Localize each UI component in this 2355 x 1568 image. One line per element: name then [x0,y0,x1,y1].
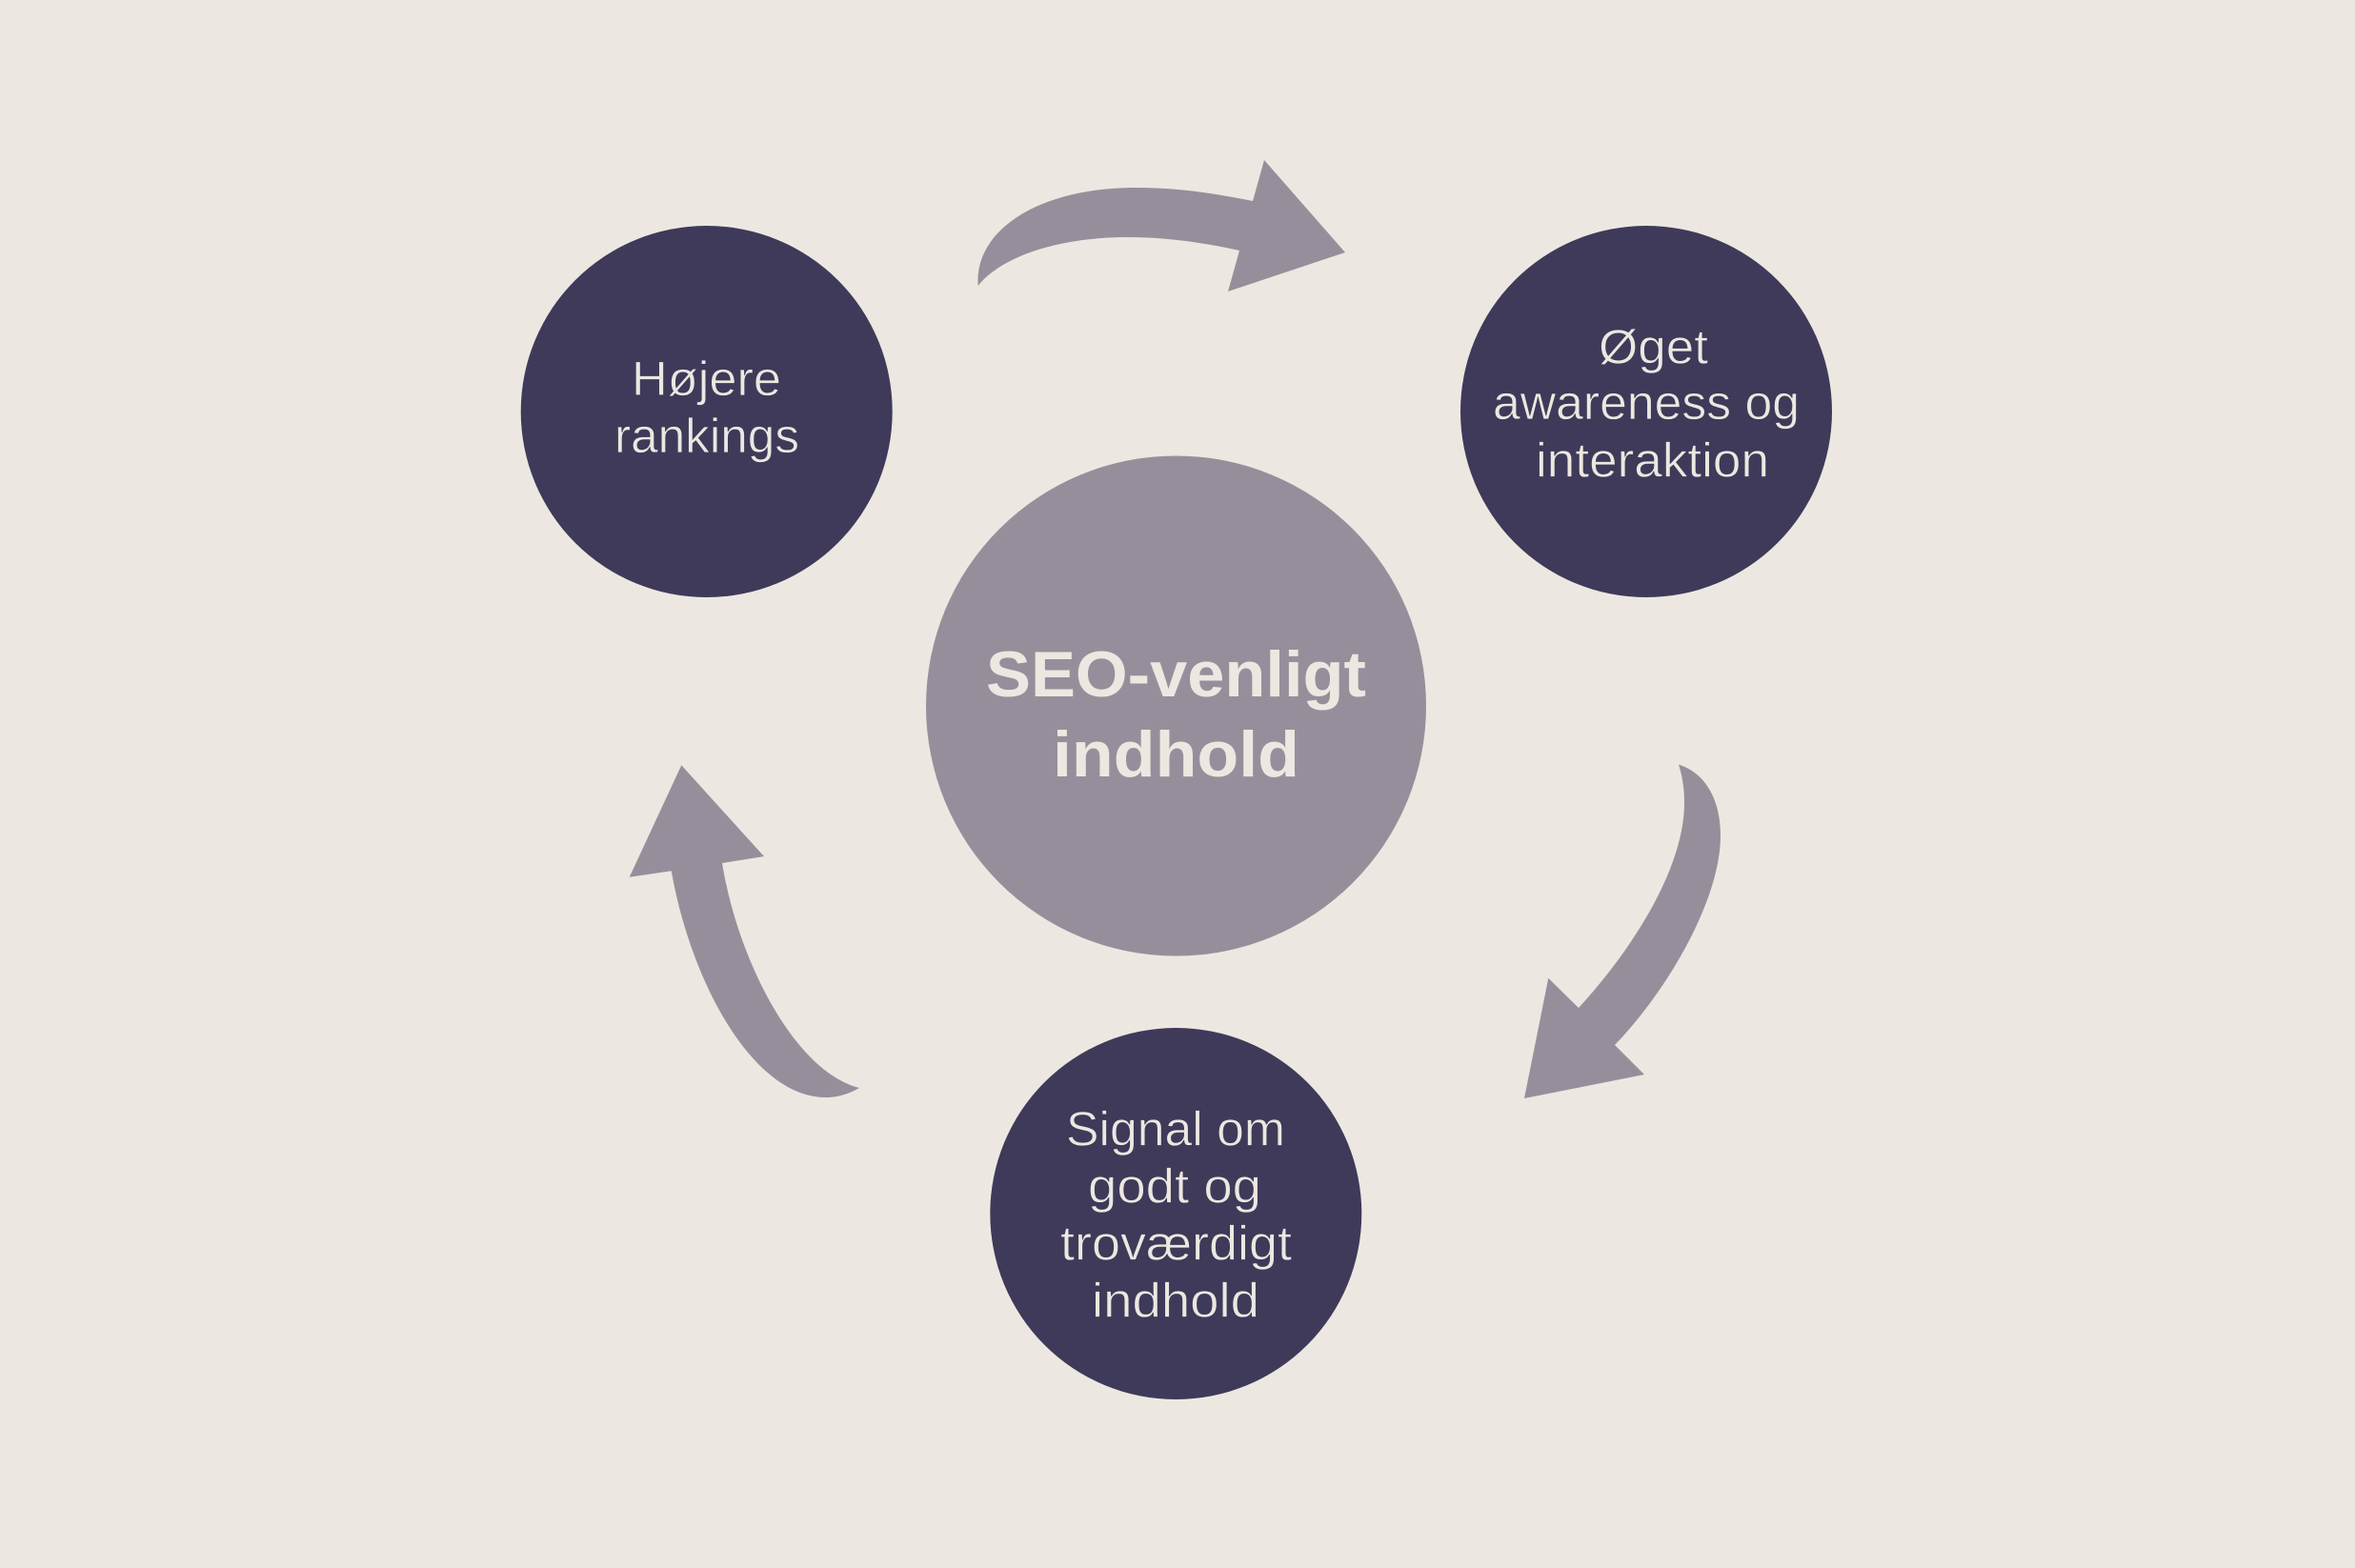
text: Signal om godt og troværdigt indhold: indhold [1092,1274,1259,1328]
center circle: SEO-venligt indhold [926,455,1426,956]
text: Signal om godt og troværdigt indhold: troværdigt [1060,1216,1292,1271]
text: Øget awareness og interaktion: awareness og [1493,375,1800,430]
center heading: indhold [1053,718,1299,791]
arrow: left, from bottom circle to left circle [630,765,859,1097]
text: Signal om godt og troværdigt indhold: godt og [1088,1159,1261,1214]
text: Højere rankings: rankings [614,409,799,463]
circle: Signal om godt og troværdigt indhold [990,1028,1361,1399]
center heading: SEO-venligt [986,638,1366,711]
arrow: top, from left circle to right circle [977,160,1345,291]
text: Signal om godt og troværdigt indhold: Signal om [1066,1102,1285,1156]
text: Øget awareness og interaktion: interaktion [1536,433,1769,488]
circle: Øget awareness og interaktion [1460,226,1832,597]
arrow: right, from right circle to bottom circle [1524,764,1721,1098]
text: Øget awareness og interaktion: Øget [1599,320,1708,374]
text: Højere rankings: Højere [632,352,781,406]
circle: Højere rankings [521,226,893,597]
